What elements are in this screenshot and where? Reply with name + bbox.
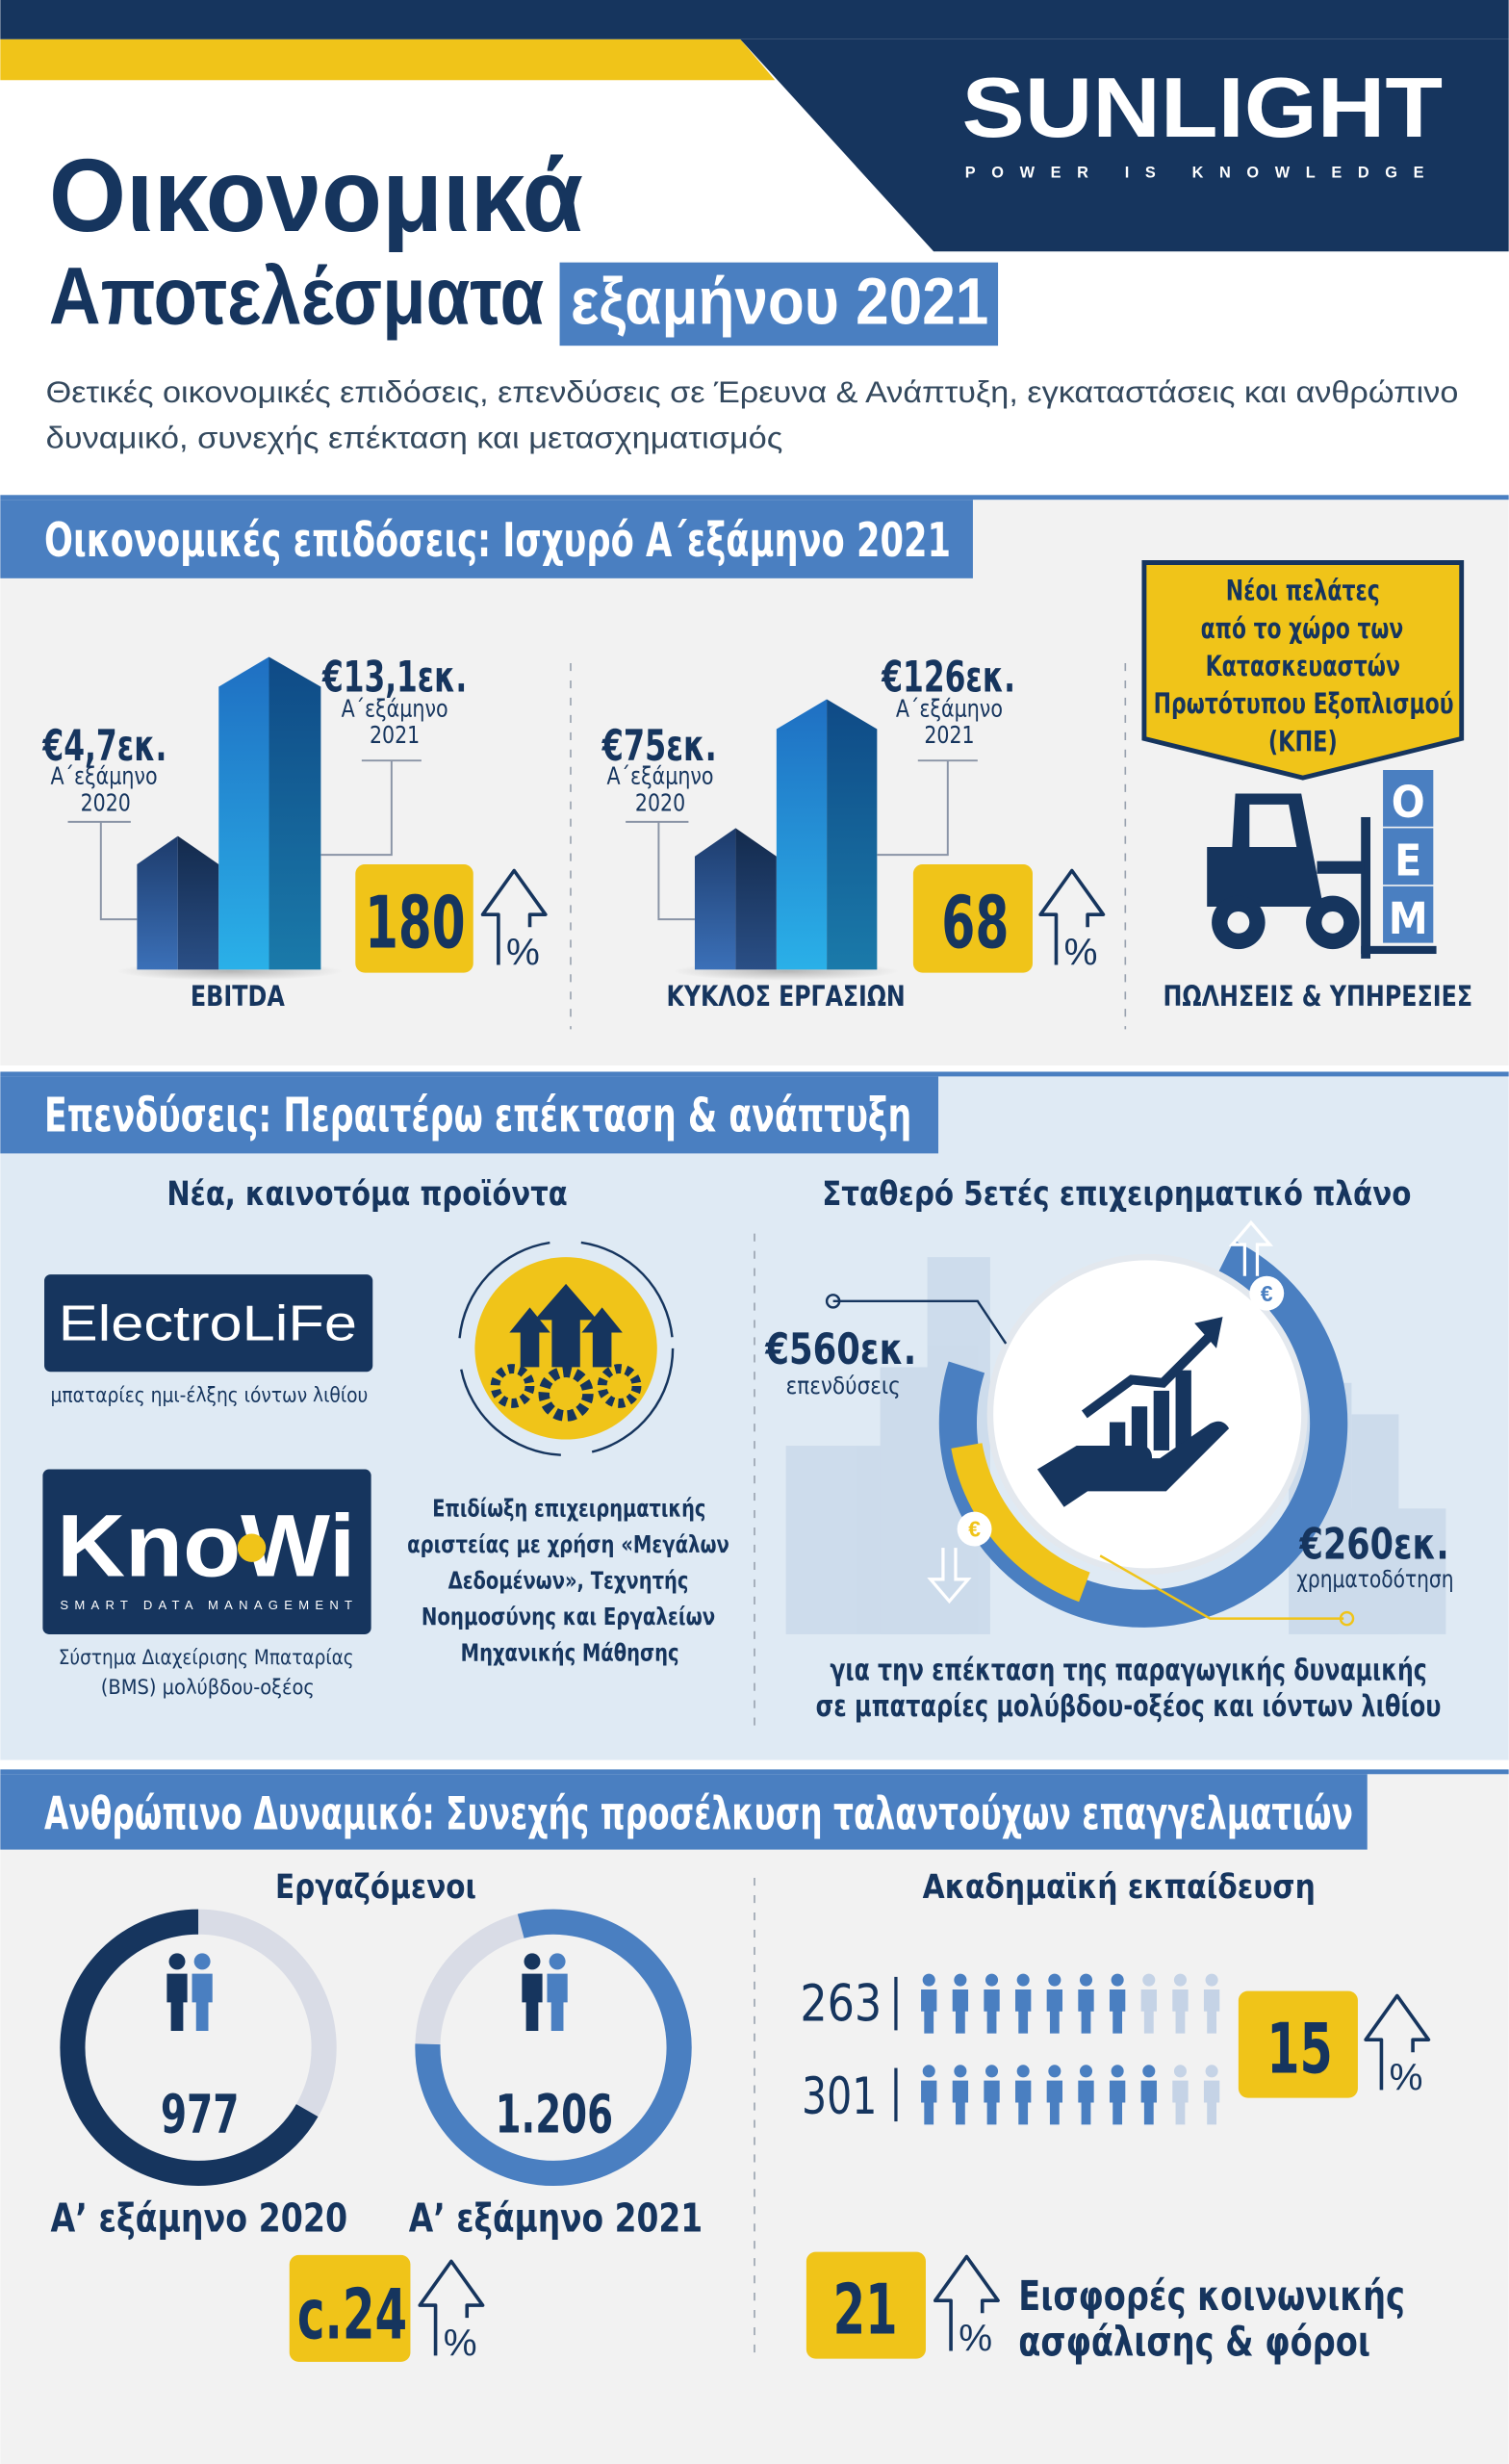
chart: employees 2020: Α’ εξάμηνο 2020 <box>51 2194 347 2241</box>
stat: 21% social contributions <box>806 2252 1405 2366</box>
chart: EBITDA: €13,1εκ. <box>321 653 467 702</box>
subtitle <box>46 374 1458 454</box>
icon: euro up <box>1232 1222 1284 1311</box>
chart: turnover: 2020 <box>635 788 685 816</box>
ElectroLiFe logo <box>44 1274 372 1407</box>
chart: turnover: €126εκ. <box>881 653 1015 702</box>
ElectroLiFe logo: μπαταρίες ημι-έλξης ιόντων λιθίου <box>51 1383 368 1407</box>
text: business excellence <box>407 1495 729 1667</box>
subheading: employees: Εργαζόμενοι <box>275 1868 476 1907</box>
logo: POWER IS KNOWLEDGE <box>965 164 1424 181</box>
chart: employees 2021: Α’ εξάμηνο 2021 <box>409 2194 703 2241</box>
section 3 heading <box>0 1774 1368 1850</box>
icon: hand with chart <box>1037 1317 1229 1507</box>
logo: SUNLIGHT <box>962 60 1443 155</box>
stat: 21% social contributions: ασφάλισης & φόροι <box>1018 2319 1370 2366</box>
text: business excellence: Επιδίωξη επιχειρηματικής <box>432 1495 705 1523</box>
stat: investments: €560εκ. <box>765 1325 916 1374</box>
chart: academic people: 263 <box>800 1976 882 2034</box>
callout: new OEM clients: Νέοι πελάτες <box>1226 575 1380 607</box>
stat: 15% <box>1239 1991 1428 2098</box>
chart: employees 2021: 1.206 <box>496 2084 613 2146</box>
callout: new OEM clients <box>1144 562 1462 778</box>
chart: EBITDA: EBITDA <box>191 980 285 1013</box>
subheading: 5-year plan: Σταθερό 5ετές επιχειρηματικό πλάνο <box>822 1175 1411 1214</box>
chart: investment ring <box>827 1257 1353 1625</box>
KnoWi logo: Σύστημα Διαχείρισης Μπαταρίας <box>59 1646 354 1670</box>
stat: financing: €260εκ. <box>1299 1521 1449 1570</box>
section 2 background <box>0 1073 1509 1760</box>
chart: EBITDA: 180 <box>365 880 466 964</box>
callout: new OEM clients: Πρωτότυπου Εξοπλισμού <box>1154 687 1454 720</box>
subheading: new products: Νέα, καινοτόμα προϊόντα <box>166 1175 568 1214</box>
chart: EBITDA: 2021 <box>370 721 420 749</box>
section 2 heading: Επενδύσεις: Περαιτέρω επέκταση & ανάπτυξη <box>44 1089 911 1143</box>
stat: 15%: 15 <box>1266 2008 1333 2089</box>
ElectroLiFe logo: ElectroLiFe <box>59 1296 357 1352</box>
title: Αποτελέσματα <box>49 249 544 341</box>
icon: gears growth <box>459 1242 673 1455</box>
icon: euro down <box>931 1512 992 1602</box>
text: expansion <box>816 1653 1441 1724</box>
chart: turnover: Α΄εξάμηνο <box>896 694 1003 722</box>
KnoWi logo <box>42 1470 371 1700</box>
KnoWi logo: KnoWi <box>57 1498 355 1596</box>
chart: academic people <box>800 1974 1219 2126</box>
text: business excellence: αριστείας με χρήση «Μεγάλων <box>407 1530 729 1558</box>
text: business excellence: Δεδομένων», Τεχνητής <box>448 1567 688 1595</box>
subtitle: δυναμικό, συνεχής επέκταση και μετασχηματισμός <box>46 420 782 454</box>
header band <box>0 0 1509 251</box>
chart: employees 2021 <box>399 1893 707 2241</box>
chart: EBITDA: 2020 <box>81 788 131 816</box>
chart: turnover: ΚΥΚΛΟΣ ΕΡΓΑΣΙΩΝ <box>667 980 906 1013</box>
section 1 heading: Οικονομικές επιδόσεις: Ισχυρό Α΄εξάμηνο 2021 <box>44 513 951 568</box>
background buildings <box>786 1257 1445 1634</box>
stat: financing <box>1296 1521 1454 1593</box>
chart: academic people: 301 <box>802 2068 877 2126</box>
chart: employees 2020 <box>51 1922 347 2241</box>
chart: EBITDA: €4,7εκ. <box>42 722 166 771</box>
title: Οικονομικά <box>49 137 583 253</box>
label: sales & services: ΠΩΛΗΣΕΙΣ & ΥΠΗΡΕΣΙΕΣ <box>1163 980 1472 1013</box>
icon: forklift OEM: E <box>1394 834 1421 886</box>
section 1 heading <box>0 500 973 578</box>
chart: EBITDA: Α΄εξάμηνο <box>51 762 158 790</box>
icon: euro down: € <box>968 1517 981 1542</box>
subheading: academic: Ακαδημαϊκή εκπαίδευση <box>923 1868 1316 1907</box>
chart: turnover <box>601 653 1103 1013</box>
callout: new OEM clients: από το χώρο των <box>1201 612 1403 645</box>
icon: forklift OEM: M <box>1389 893 1428 944</box>
stat: 21% social contributions: 21 <box>833 2269 898 2349</box>
icon: euro up: € <box>1261 1281 1273 1306</box>
subtitle: Θετικές οικονομικές επιδόσεις, επενδύσεις σε Έρευνα & Ανάπτυξη, εγκαταστάσεις και ανθρώπινο <box>46 374 1458 409</box>
section 1 background <box>0 497 1509 1065</box>
callout: new OEM clients: (ΚΠΕ) <box>1268 725 1338 757</box>
section 3 background <box>0 1771 1509 2464</box>
callout: new OEM clients: Κατασκευαστών <box>1206 650 1400 682</box>
section 2 heading <box>0 1076 938 1153</box>
stat: 21% social contributions: Εισφορές κοινωνικής <box>1018 2273 1405 2321</box>
KnoWi logo: SMART DATA MANAGEMENT <box>60 1598 352 1612</box>
chart: employees 2020: 977 <box>161 2084 239 2146</box>
stat: investments <box>765 1325 916 1399</box>
icon: forklift OEM <box>1207 770 1437 959</box>
stat: c.24%: c.24 <box>297 2273 407 2354</box>
chart: EBITDA: Α΄εξάμηνο <box>342 694 448 722</box>
KnoWi logo: (BMS) μολύβδου-οξέος <box>101 1676 315 1700</box>
chart: turnover: Α΄εξάμηνο <box>607 762 714 790</box>
icon: forklift OEM: O <box>1392 777 1425 828</box>
text: business excellence: Μηχανικής Μάθησης <box>461 1639 679 1667</box>
chart: turnover: €75εκ. <box>601 722 717 771</box>
stat: financing: χρηματοδότηση <box>1296 1565 1454 1593</box>
chart: turnover: 68 <box>941 880 1009 964</box>
title: εξαμήνου 2021 <box>571 264 988 338</box>
stat: c.24% <box>290 2255 483 2364</box>
title <box>49 137 998 346</box>
stat: investments: επενδύσεις <box>786 1372 901 1399</box>
chart: turnover: 2021 <box>924 721 975 749</box>
text: business excellence: Νοημοσύνης και Εργαλείων <box>422 1603 715 1630</box>
chart: EBITDA <box>42 653 546 1013</box>
